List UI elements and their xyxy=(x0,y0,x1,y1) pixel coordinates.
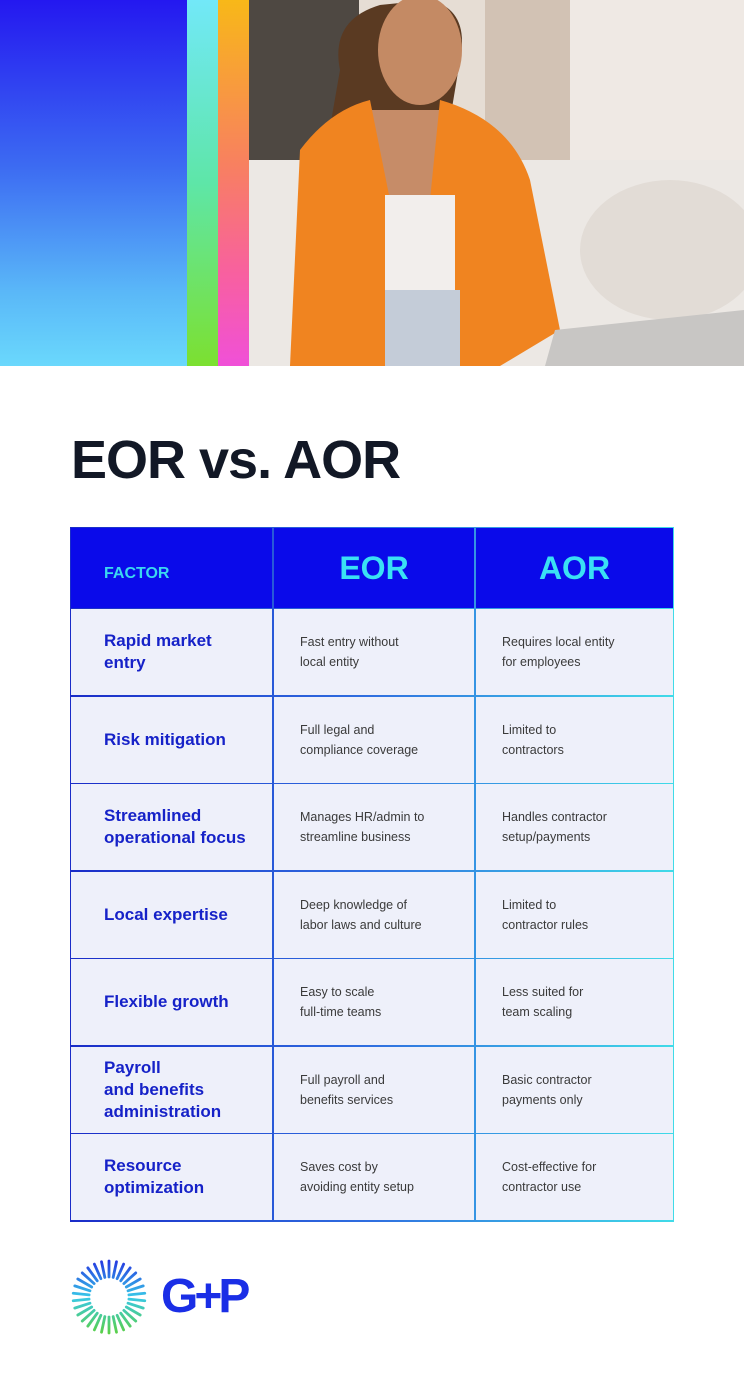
header row: AOR xyxy=(539,550,610,586)
row: resource optimization: avoiding entity setup xyxy=(300,1180,414,1194)
header row: FACTOR xyxy=(104,565,169,582)
row: payroll xyxy=(71,1047,673,1133)
row: flexible growth: Flexible growth xyxy=(104,992,229,1011)
row: streamlined operational focus: Handles contractor xyxy=(502,810,607,824)
row: rapid market entry: entry xyxy=(104,653,146,672)
row: rapid market entry: Rapid market xyxy=(104,631,212,650)
row: streamlined operational focus: streamline business xyxy=(300,830,410,844)
row: payroll: and benefits xyxy=(104,1080,204,1099)
row: rapid market entry: for employees xyxy=(502,655,581,669)
row: local expertise: labor laws and culture xyxy=(300,918,422,932)
cyan-green strip xyxy=(187,0,218,366)
row: streamlined operational focus: operational focus xyxy=(104,828,246,847)
row: payroll: Payroll xyxy=(104,1058,161,1077)
row: resource optimization: Resource xyxy=(104,1156,181,1175)
row: local expertise xyxy=(71,872,673,958)
row: risk mitigation: contractors xyxy=(502,743,564,757)
row: payroll: benefits services xyxy=(300,1093,393,1107)
gradient panel xyxy=(0,0,187,366)
row: streamlined operational focus xyxy=(71,784,673,870)
logo text: G+P xyxy=(161,1270,246,1323)
row: risk mitigation: Limited to xyxy=(502,723,556,737)
header row xyxy=(71,528,673,608)
row: flexible growth xyxy=(71,959,673,1045)
row: rapid market entry: local entity xyxy=(300,655,359,669)
row: local expertise: contractor rules xyxy=(502,918,588,932)
row: rapid market entry: Fast entry without xyxy=(300,635,399,649)
title: EOR vs. AOR xyxy=(71,430,400,490)
row: rapid market entry xyxy=(71,609,673,695)
row: risk mitigation: Risk mitigation xyxy=(104,730,226,749)
row: flexible growth: full-time teams xyxy=(300,1005,381,1019)
row: resource optimization xyxy=(71,1134,673,1220)
row: risk mitigation xyxy=(71,697,673,783)
row: flexible growth: Less suited for xyxy=(502,985,583,999)
row: resource optimization: optimization xyxy=(104,1178,204,1197)
row: streamlined operational focus: Streamlined xyxy=(104,806,201,825)
comparison table xyxy=(70,527,674,1222)
row: payroll: administration xyxy=(104,1102,221,1121)
row: local expertise: Deep knowledge of xyxy=(300,898,407,912)
orange-pink strip xyxy=(218,0,249,366)
row: risk mitigation: Full legal and xyxy=(300,723,374,737)
logo xyxy=(72,1260,249,1334)
row: risk mitigation: compliance coverage xyxy=(300,743,418,757)
row: payroll: payments only xyxy=(502,1093,583,1107)
row: flexible growth: Easy to scale xyxy=(300,985,374,999)
row: streamlined operational focus: setup/payments xyxy=(502,830,590,844)
photo: woman with laptop xyxy=(249,0,744,366)
row: rapid market entry: Requires local entity xyxy=(502,635,615,649)
row: payroll: Basic contractor xyxy=(502,1073,592,1087)
row: flexible growth: team scaling xyxy=(502,1005,572,1019)
header image band xyxy=(0,0,744,366)
icon: sunburst xyxy=(72,1260,146,1334)
row: local expertise: Local expertise xyxy=(104,905,228,924)
row: resource optimization: Cost-effective for xyxy=(502,1160,596,1174)
row: local expertise: Limited to xyxy=(502,898,556,912)
row: payroll: Full payroll and xyxy=(300,1073,385,1087)
row: streamlined operational focus: Manages HR/admin to xyxy=(300,810,424,824)
row: resource optimization: Saves cost by xyxy=(300,1160,378,1174)
row: resource optimization: contractor use xyxy=(502,1180,581,1194)
header row: EOR xyxy=(339,550,409,586)
